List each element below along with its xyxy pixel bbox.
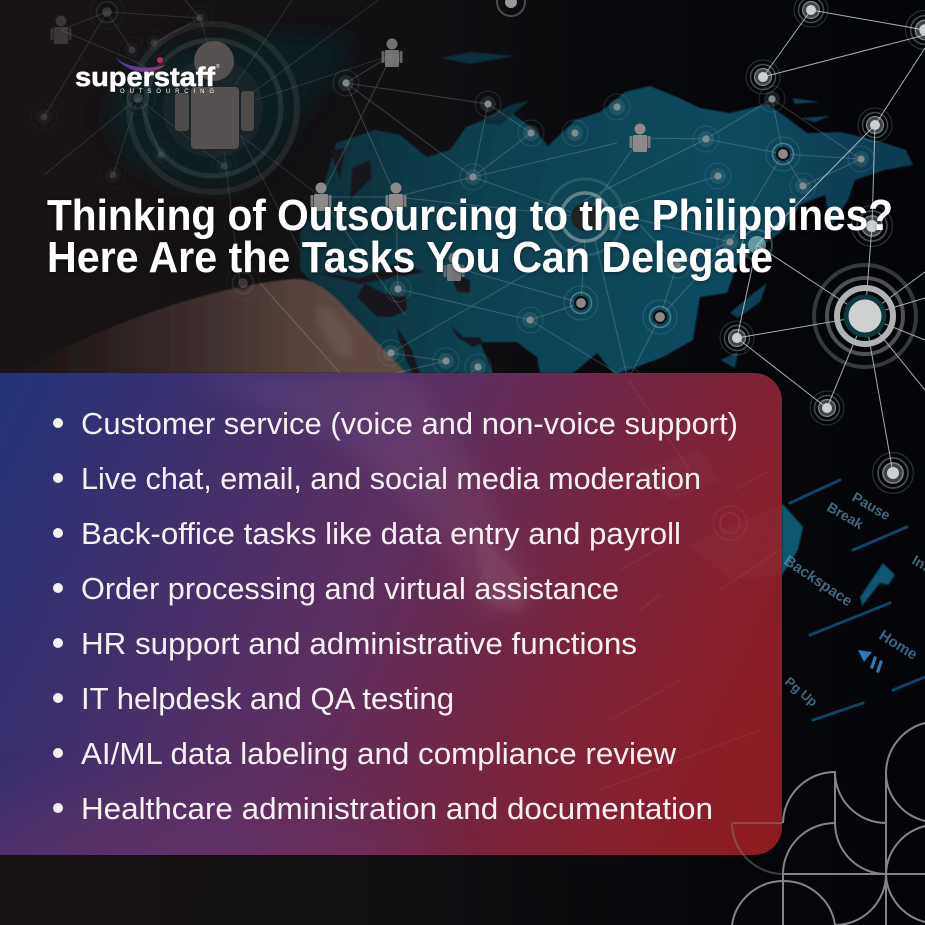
icon: keyboard play-pause glyph — [858, 650, 883, 673]
keyboard photo: Home — [876, 627, 920, 663]
decorative geometric line pattern — [732, 723, 925, 925]
network lines: left faint — [44, 0, 392, 283]
photo showing through panel — [0, 373, 782, 920]
task list: Live chat, email, and social media moderation — [81, 461, 701, 496]
network lines: right bright — [737, 10, 925, 473]
logo: superstaff outsourcing: OUTSOURCING — [120, 89, 214, 95]
network nodes: left side, faint — [31, 0, 260, 300]
inland dark seas — [317, 148, 483, 373]
icon: main hub node — [814, 265, 916, 367]
task list: IT helpdesk and QA testing — [81, 681, 454, 716]
keyboard photo — [781, 480, 925, 720]
task list — [53, 406, 738, 826]
panel: task list background — [0, 373, 782, 855]
task list: Customer service (voice and non-voice support) — [81, 406, 738, 441]
task list: HR support and administrative functions — [81, 626, 637, 661]
keyboard photo: Break — [824, 499, 866, 532]
world map silhouette — [105, 33, 913, 606]
task list: AI/ML data labeling and compliance review — [81, 736, 677, 771]
network lines: map — [260, 55, 861, 380]
network nodes: right bright — [720, 0, 925, 493]
task list: Order processing and virtual assistance — [81, 571, 619, 606]
task list: Healthcare administration and documentation — [81, 791, 713, 826]
logo: superstaff outsourcing: ® — [216, 63, 220, 70]
title — [47, 191, 893, 282]
title: Here Are the Tasks You Can Delegate — [47, 233, 773, 282]
keyboard photo: Pg Up — [782, 674, 821, 709]
icon: large person with rings — [129, 24, 297, 192]
hand photo — [20, 279, 407, 373]
task list: Back-office tasks like data entry and payroll — [81, 516, 681, 551]
logo: superstaff outsourcing: superstaff — [75, 62, 216, 92]
keyboard photo: Pause — [850, 489, 893, 523]
keyboard photo: Backspace — [781, 552, 855, 610]
network nodes: map — [310, 0, 874, 393]
